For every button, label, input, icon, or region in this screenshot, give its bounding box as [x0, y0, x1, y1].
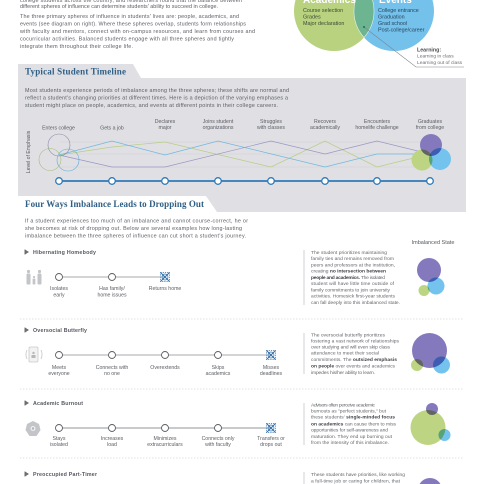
- venn diagram: spheres of influence: [294, 0, 434, 51]
- title: preoccupied part-timer: Preoccupied Part-Timer: [33, 472, 97, 478]
- description: [311, 250, 400, 306]
- description: The student prioritizes maintaining: [311, 250, 387, 256]
- description: attendance to meet their social: [311, 351, 379, 357]
- panel: typical student timeline: [18, 64, 466, 212]
- intro text block: [19, 0, 255, 50]
- imbalanced state circles: [417, 258, 444, 296]
- description: The oversocial butterfly prioritizes: [311, 333, 386, 339]
- path labels: isolated: [50, 442, 68, 448]
- section: academic burnout: [24, 400, 450, 448]
- path nodes: [56, 350, 276, 360]
- timeline event labels: Graduates: [418, 119, 443, 125]
- timeline event labels: Gets a job: [100, 126, 124, 132]
- callout: learning overlap: Learning:: [417, 48, 441, 54]
- description: [311, 333, 400, 376]
- path labels: deadlines: [260, 371, 283, 377]
- intro text block: integrate them throughout their college life.: [20, 44, 133, 50]
- icon: family: [26, 270, 42, 284]
- path labels: with faculty: [205, 442, 231, 448]
- path labels: [50, 286, 181, 298]
- path labels: Overextends: [150, 365, 180, 371]
- timeline event labels: Declares: [155, 119, 176, 125]
- description: over studying and will even skip class: [311, 344, 391, 350]
- path nodes: [56, 272, 170, 282]
- path labels: Stays: [53, 436, 66, 442]
- description: on people over events and academics: [311, 363, 396, 369]
- section: preoccupied part-timer: [24, 472, 442, 484]
- description: fostering a vast network of relationships: [311, 338, 400, 344]
- heading: imbalanced state: Imbalanced State: [412, 240, 454, 246]
- description: commitments. The outsized emphasis: [311, 357, 397, 363]
- end state circles: balanced: [412, 134, 451, 170]
- events label: Grad school: [378, 21, 407, 27]
- academics label: Major declaration: [303, 21, 344, 27]
- timeline event labels: Recovers: [314, 119, 336, 125]
- imbalanced state circles: [410, 403, 450, 445]
- icon: burning gear: [26, 421, 40, 436]
- academics label: [303, 0, 356, 27]
- path labels: Meets: [52, 365, 66, 371]
- description: These students have priorities, like working: [311, 472, 405, 478]
- timeline event labels: major: [159, 125, 172, 131]
- line chart: emphasis over time: [39, 134, 430, 171]
- description: maturation. They end up burning out: [311, 434, 393, 440]
- path labels: extracurriculars: [147, 442, 183, 448]
- intro text block: different spheres of influence can determine students' ability to succeed in college.: [20, 4, 218, 10]
- timeline event labels: Encounters: [364, 119, 391, 125]
- timeline intro text: Most students experience periods of imbalance among the three spheres; these shifts are normal and: [25, 88, 289, 94]
- timeline track with nodes: [56, 178, 433, 184]
- description: these students' single-minded focus: [311, 415, 395, 421]
- timeline intro text: reflect a student's changing priorities at different times. Here is a depiction of the varying emphases a: [25, 96, 288, 102]
- timeline event labels: Enters college: [42, 126, 75, 132]
- description: opportunities for self-awareness and: [311, 428, 388, 434]
- title: academic burnout: Academic Burnout: [33, 401, 83, 407]
- path labels: drops out: [260, 442, 282, 448]
- callout: learning overlap: Learning in class: [417, 54, 454, 60]
- description: peers and professors at the institution,: [311, 262, 395, 268]
- path labels: early: [53, 292, 65, 298]
- description: burnouts as "perfect students," but: [311, 409, 387, 415]
- intro text block: The three primary spheres of influence in students' lives are: people, academics, and: [20, 14, 239, 20]
- path labels: Returns home: [149, 286, 181, 292]
- intro text block: with faculty and mentors, connect with on-campus resources, and learn from courses and: [19, 29, 255, 35]
- timeline intro text: student might place on people, academics, and events at different points in their college careers.: [25, 103, 278, 109]
- description: people and academics. The isolated: [311, 275, 385, 281]
- path labels: [50, 436, 285, 448]
- description: on academics can cause them to miss: [311, 422, 397, 428]
- path labels: [48, 365, 283, 377]
- four ways intro text: imbalance between the three spheres of influence can cut short a student's journey.: [25, 234, 246, 240]
- events label: Graduation: [378, 14, 405, 20]
- title: oversocial butterfly: Oversocial Butterfly: [33, 328, 87, 334]
- path labels: Has family/: [99, 286, 125, 292]
- description: impedes his/her ability to learn.: [311, 370, 375, 376]
- path labels: academics: [206, 371, 231, 377]
- timeline intro text: [25, 88, 289, 109]
- path labels: home issues: [97, 292, 127, 298]
- heading: four ways: Four Ways Imbalance Leads to Dropping Out: [25, 199, 204, 209]
- four ways intro text: [25, 218, 248, 240]
- timeline event labels: [42, 119, 444, 132]
- path labels: Connects only: [202, 436, 235, 442]
- timeline event labels: Joins student: [203, 119, 234, 125]
- events label: College entrance: [378, 8, 419, 14]
- callout: learning overlap: Learning out of class: [417, 60, 463, 66]
- axis label: level of emphasis: Level of Emphasis: [26, 130, 32, 173]
- description: can fall deeply into this imbalanced state.: [311, 300, 400, 306]
- path labels: load: [107, 442, 117, 448]
- path labels: Isolates: [50, 286, 68, 292]
- description: Advisors often perceive academic: [311, 403, 376, 409]
- intro text block: events (see diagram on right). Where these spheres overlap, students form relationships: [20, 22, 246, 28]
- imbalanced state circles: [411, 333, 450, 374]
- timeline event labels: academically: [310, 125, 340, 131]
- path labels: no one: [104, 371, 120, 377]
- description: activities. Homesick first-year students: [311, 294, 396, 300]
- description: student will have little time outside of: [311, 281, 395, 287]
- path labels: Connects with: [96, 365, 128, 371]
- heading: timeline: Typical Student Timeline: [25, 66, 126, 76]
- description: family commitments to join university: [311, 287, 391, 293]
- timeline event labels: organizations: [203, 125, 234, 131]
- timeline event labels: from college: [416, 125, 444, 131]
- description: creating no intersection between: [311, 269, 386, 275]
- path labels: Misses: [263, 365, 279, 371]
- path labels: Minimizes: [153, 436, 177, 442]
- path labels: Skips: [212, 365, 225, 371]
- events label: Post-college/career: [378, 28, 425, 34]
- description: [311, 403, 397, 446]
- academics label: Course selection: [303, 8, 343, 14]
- imbalanced state circle: [418, 478, 442, 484]
- path labels: Transfers or: [257, 436, 285, 442]
- four ways intro text: she becomes at risk of dropping out. Below are several examples how long-lasting: [25, 226, 242, 232]
- events label: [378, 0, 425, 34]
- timeline event labels: homelife challenge: [355, 125, 399, 131]
- section: oversocial butterfly: [24, 328, 450, 377]
- path nodes: [56, 424, 276, 432]
- section: hibernating homebody: [24, 250, 444, 306]
- description: family ties and remains removed from: [311, 256, 394, 262]
- callout: learning overlap: [363, 26, 464, 67]
- description: from the intensity of this imbalance.: [311, 440, 389, 446]
- path labels: everyone: [48, 371, 70, 377]
- title: hibernating homebody: Hibernating Homebody: [33, 250, 96, 256]
- timeline event labels: with classes: [257, 125, 285, 131]
- timeline event labels: Struggles: [260, 119, 282, 125]
- academics label: Grades: [303, 14, 321, 20]
- four ways intro text: If a student experiences too much of an imbalance and cannot course-correct, he or: [25, 218, 248, 224]
- icon: phone with signal: [26, 347, 42, 362]
- path labels: Increases: [101, 436, 124, 442]
- intro text block: cocurricular activities. Balanced students engage with all three spheres and tightly: [20, 36, 234, 42]
- description: [311, 472, 405, 484]
